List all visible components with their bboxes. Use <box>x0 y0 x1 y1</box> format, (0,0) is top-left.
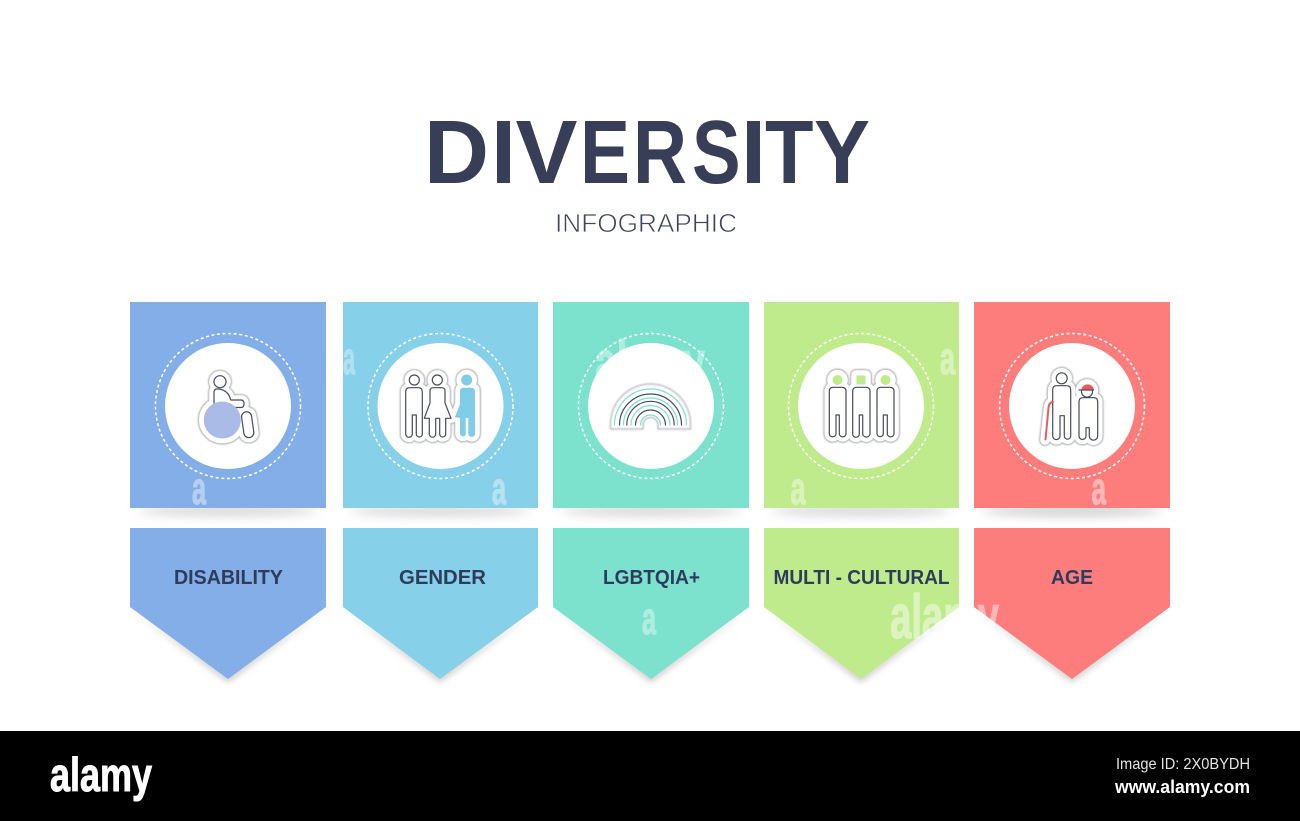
watermark across pentagons: alamy <box>890 583 999 652</box>
label: age <box>974 528 1170 679</box>
footer logo: alamy <box>50 748 152 801</box>
panel: multi-cultural <box>764 302 959 516</box>
label: multi-cultural: MULTI - CULTURAL <box>774 567 950 589</box>
footer url: www.alamy.com <box>1114 777 1250 797</box>
label: gender <box>343 528 538 679</box>
panel: age: a <box>1092 463 1107 514</box>
panel: multi-cultural: a <box>940 333 956 384</box>
panel: gender: a <box>343 333 355 384</box>
panel: LGBTQIA+ <box>553 302 749 516</box>
icon: gender figures <box>406 374 475 437</box>
label: LGBTQIA+: LGBTQIA+ <box>603 567 700 589</box>
title: S <box>692 103 741 203</box>
icon: three figures <box>829 374 894 437</box>
title: I <box>741 103 766 203</box>
panel: multi-cultural: a <box>790 463 806 514</box>
subtitle: INFOGRAPHIC <box>555 208 737 238</box>
label: LGBTQIA+: a <box>642 593 657 644</box>
panel: gender: a <box>492 463 507 514</box>
title: D <box>424 103 489 203</box>
title: T <box>765 103 814 203</box>
panel: LGBTQIA+: alamy <box>595 329 705 398</box>
panel: age <box>974 302 1170 516</box>
image id: Image ID: 2X0BYDH <box>1116 756 1250 773</box>
label: disability <box>130 528 326 679</box>
label: age: AGE <box>1051 567 1093 589</box>
title: R <box>633 103 687 203</box>
icon: rainbow <box>610 384 690 429</box>
title: Y <box>814 103 870 203</box>
panel: gender <box>343 302 538 516</box>
label: disability: DISABILITY <box>174 567 284 589</box>
label shadows <box>134 612 1166 682</box>
icon: elder and child <box>1045 373 1098 440</box>
label: LGBTQIA+ <box>553 528 749 679</box>
title: I <box>491 103 516 203</box>
label: multi-cultural <box>764 528 959 679</box>
label: gender: GENDER <box>399 567 487 589</box>
title: V <box>516 103 578 203</box>
panel: disability: a <box>192 463 207 514</box>
panel: disability <box>130 302 326 516</box>
title: E <box>580 103 630 203</box>
footer bar <box>0 731 1300 821</box>
icon: wheelchair user <box>204 376 254 438</box>
